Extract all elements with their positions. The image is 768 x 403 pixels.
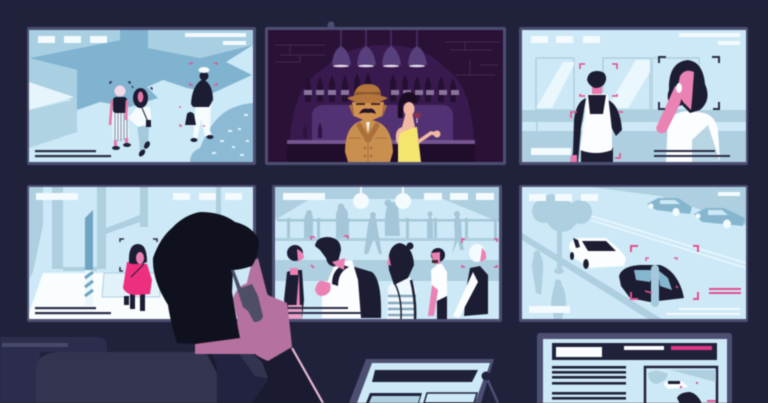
bar counter: [287, 140, 475, 144]
thumbnail of road feed: [645, 367, 717, 403]
white tags: [531, 33, 740, 155]
white tags: [283, 193, 494, 200]
panel: street monitor: [27, 27, 256, 165]
man in white tee: [428, 248, 447, 319]
caption lines: [287, 307, 361, 314]
woman in pink coat: [123, 244, 152, 311]
detective: [345, 84, 393, 162]
bearded man with backpack: [315, 237, 381, 318]
man with white backpack: [570, 71, 622, 162]
tablet: right document screen: [537, 333, 732, 403]
parked blue cars: [647, 198, 745, 228]
balcony rail and silhouettes: [277, 200, 499, 254]
tracking brackets: [110, 63, 217, 126]
bush: [190, 103, 253, 162]
phone: [231, 270, 263, 322]
bottles: [305, 72, 456, 102]
floor bands: [522, 110, 746, 122]
white tags: [529, 192, 740, 315]
tablet: left screen on stand: [349, 359, 498, 403]
woman with striped skirt: [110, 86, 131, 150]
woman in dark dress: [284, 245, 304, 319]
panel: shop window monitor: [519, 27, 748, 165]
distant verge: [590, 187, 746, 225]
ceiling: [275, 187, 499, 222]
operator on the phone: [153, 212, 323, 403]
woman with jeans: [128, 88, 152, 158]
white tags: [38, 33, 246, 45]
sub panels: [366, 393, 422, 403]
white floor: [29, 273, 190, 319]
jacket: [206, 348, 323, 403]
pendant lamps: [332, 30, 427, 67]
columns: [29, 187, 221, 280]
sidewalk: [522, 233, 662, 319]
tracking brackets: [571, 64, 623, 158]
woman in yellow dress: [396, 92, 440, 162]
floor bands: [275, 238, 499, 241]
panel: lobby monitor: [27, 185, 256, 322]
black car with open door: [619, 265, 684, 307]
arch alcove: [290, 45, 474, 144]
hair: [153, 212, 259, 344]
elder with white hair and vest: [453, 244, 488, 318]
brick lines: [275, 42, 500, 75]
white car: [569, 238, 626, 269]
header bar: [372, 370, 478, 382]
tree: [532, 194, 592, 274]
lamps: [353, 187, 411, 209]
panel: road monitor: [519, 185, 748, 322]
pedestrian silhouettes: [532, 250, 566, 319]
woman with bun and striped top: [387, 242, 416, 319]
windows: [536, 58, 699, 110]
text lines: [552, 366, 626, 400]
striped sign pole: [85, 210, 93, 306]
tracking brackets: [120, 239, 157, 271]
header bar: [552, 343, 717, 360]
tracking brackets: [311, 236, 497, 268]
small bottles on counter: [303, 122, 322, 138]
neck and face: [195, 258, 275, 354]
panel: bar monitor: [265, 22, 506, 165]
buildings: [29, 30, 120, 58]
shadow on plaza: [29, 30, 253, 110]
hand: [233, 283, 292, 361]
collar stripe: [292, 348, 323, 403]
desk chair backrest: [0, 337, 217, 403]
stand: [476, 376, 498, 403]
caption lines: [35, 307, 111, 314]
panel: crowd monitor: [272, 185, 502, 322]
caption lines: [35, 150, 111, 157]
woman on phone: [656, 60, 720, 162]
man with bag: [185, 67, 214, 142]
pink bars: [709, 288, 741, 294]
road markings: [591, 216, 746, 268]
tracking brackets: [631, 246, 698, 299]
white tags: [36, 193, 242, 200]
caption lines: [654, 150, 730, 157]
